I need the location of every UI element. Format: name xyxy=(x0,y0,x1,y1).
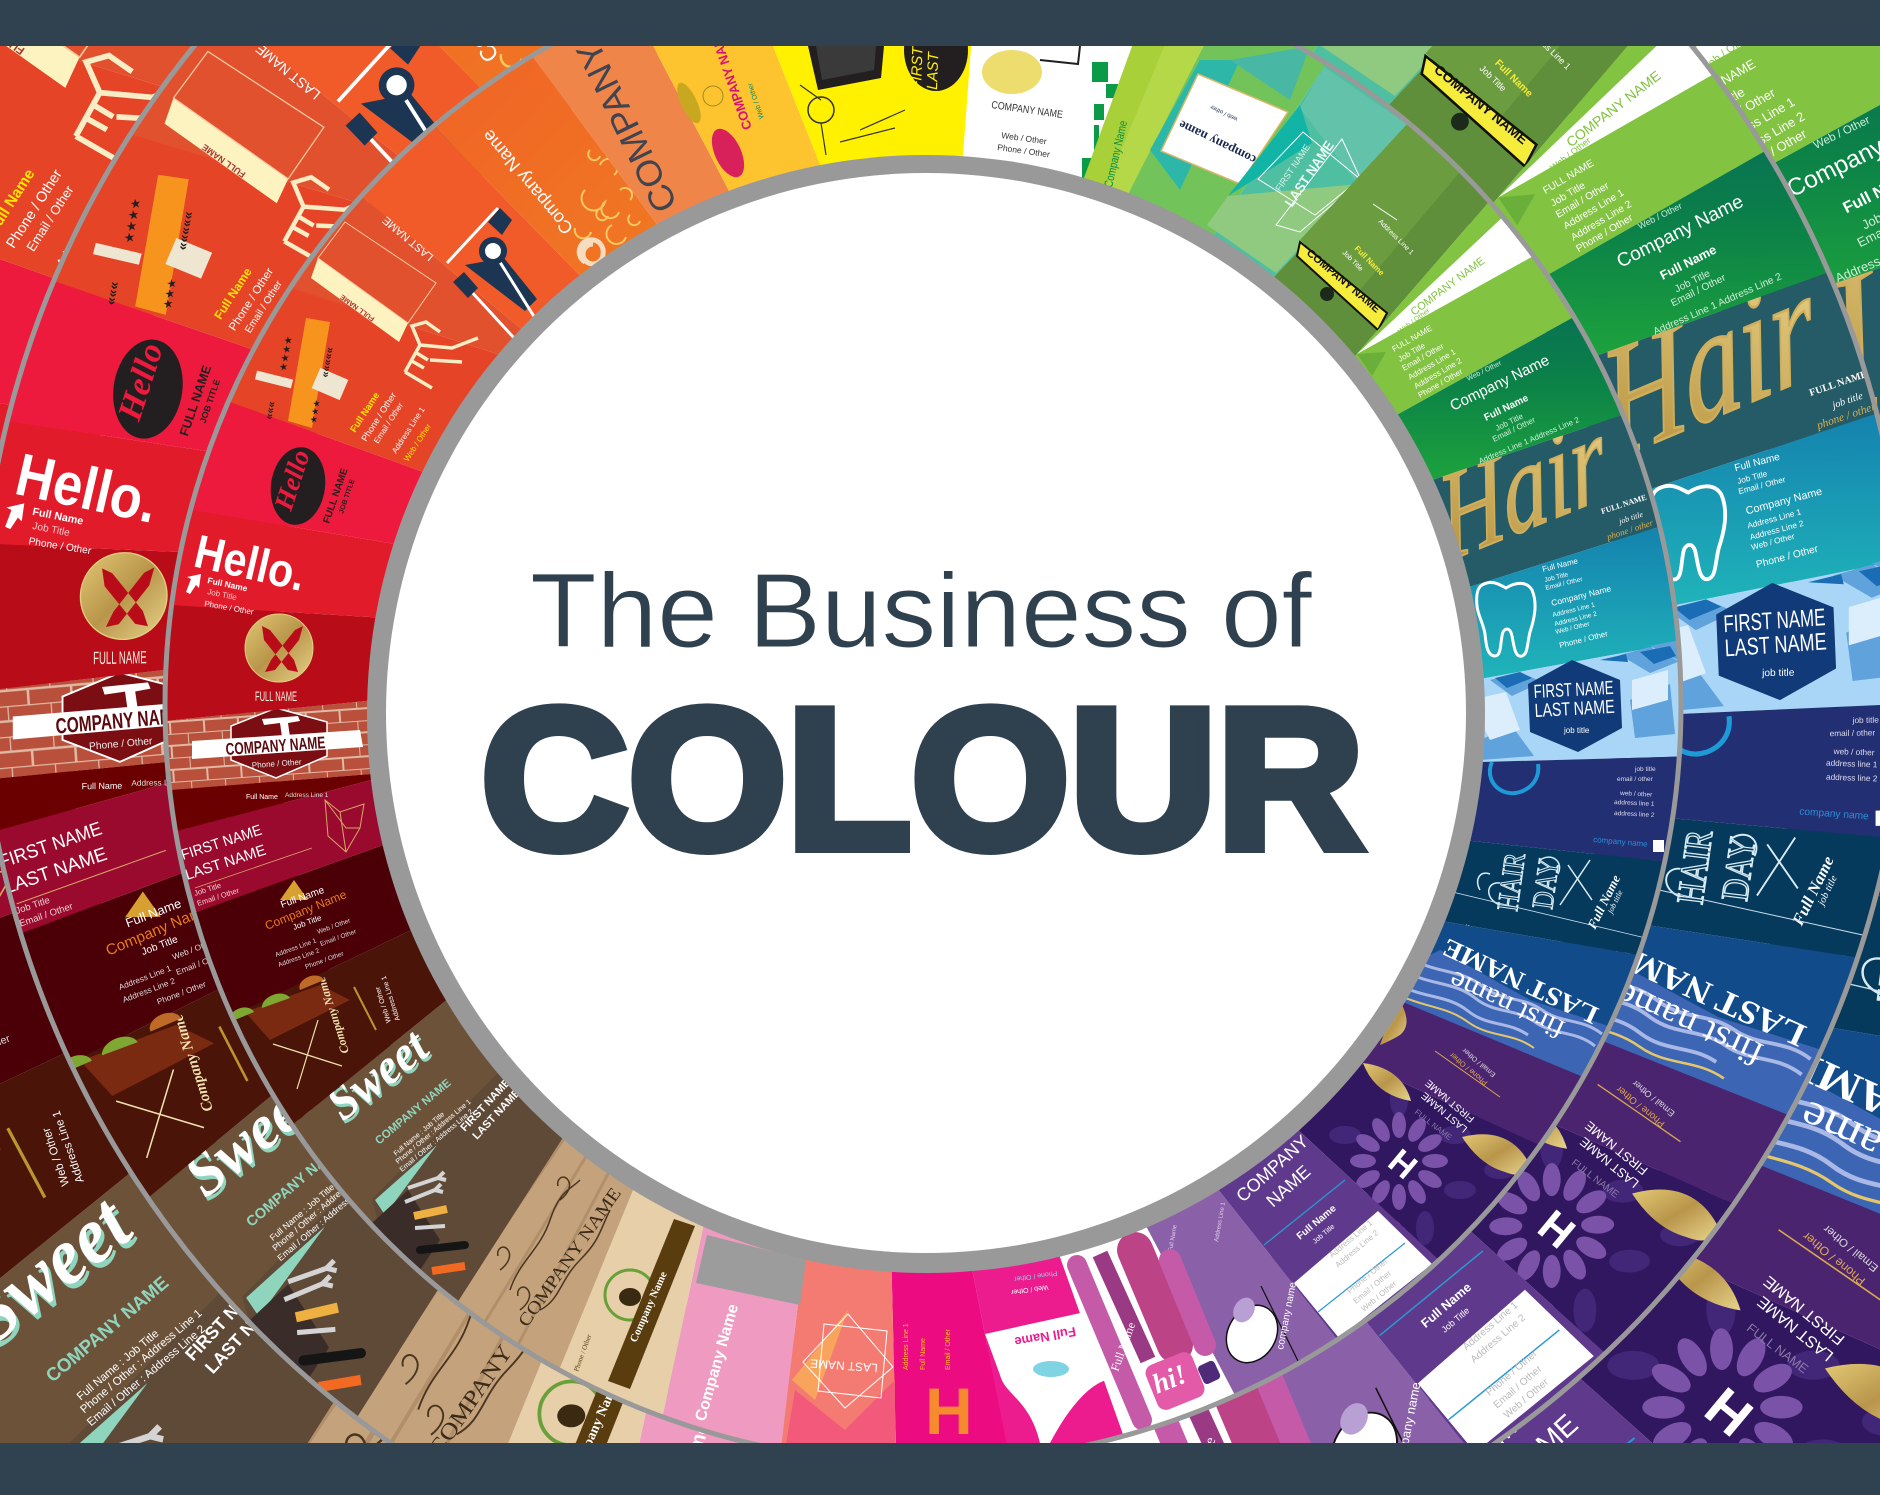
card: medium purple xyxy=(1201,1116,1505,1412)
icon: dial xyxy=(479,237,507,265)
teal first name: FIRST NAME xyxy=(1273,142,1312,193)
contact lines: Web / Other xyxy=(747,81,766,120)
dark green web: Web / Other xyxy=(1466,360,1503,383)
knives card name: FULL NAME xyxy=(255,688,297,704)
yellow label xyxy=(1297,242,1387,330)
lips last name: LAST NAME xyxy=(1419,1089,1470,1134)
panel address one: Address Line 1 xyxy=(1328,1218,1375,1260)
card: yellow gauge xyxy=(746,0,976,177)
gold swirls xyxy=(575,145,640,244)
crimson email: Email / Other xyxy=(196,886,241,908)
sweet details one: Full Name : Job Title xyxy=(393,1111,446,1158)
lips first name: FIRST NAME xyxy=(1423,1077,1477,1124)
Hello card phone: Phone / Other xyxy=(204,599,255,617)
maroon web: Web / Other xyxy=(316,917,352,936)
agate bands xyxy=(1379,950,1620,1095)
white panel xyxy=(1294,1211,1432,1338)
card: gold lips xyxy=(1334,992,1665,1182)
tooth phone: Phone / Other xyxy=(1558,629,1609,650)
brick card contact: Phone / Other xyxy=(252,758,302,770)
tooth web: Web / Other xyxy=(1555,620,1591,636)
green card full name: Full Name xyxy=(1353,244,1386,278)
hexagon first name: FIRST NAME xyxy=(1533,678,1614,703)
icon: yellow leaf xyxy=(672,80,706,126)
hair day rule xyxy=(1444,890,1654,940)
wedge name: COMPANY NAME xyxy=(1409,255,1487,318)
card: white splash xyxy=(962,0,1161,197)
texture wash xyxy=(1300,110,1470,290)
green card job: Job Title xyxy=(1341,249,1364,273)
card: dark maroon xyxy=(110,835,424,1054)
hot pink web: Web / Other xyxy=(1010,1283,1049,1295)
card: gold knives xyxy=(70,599,403,730)
navy hexagon xyxy=(1528,660,1622,752)
card: orange company name xyxy=(349,0,671,295)
hair day contact: Web / Other xyxy=(1463,922,1499,941)
white swirl xyxy=(579,240,603,264)
shadow wedge xyxy=(1357,352,1386,376)
gold chain xyxy=(354,987,376,1030)
tooth job: Job Title xyxy=(1544,571,1569,584)
wood grain xyxy=(460,1130,610,1360)
purple full name: Full Name xyxy=(1295,1203,1339,1242)
dark green name: Company Name xyxy=(1447,352,1552,415)
yellow handle xyxy=(414,1209,447,1216)
tooth company: Company Name xyxy=(1550,583,1612,608)
yellow orange name: COMPANY NAME xyxy=(706,25,755,132)
card: dark purple flower xyxy=(1283,1051,1620,1321)
hi word: hi! xyxy=(1148,1359,1191,1400)
maroon job: Job Title xyxy=(292,913,323,932)
icon: black oval xyxy=(266,444,330,528)
crimson last name: LAST NAME xyxy=(183,842,268,884)
label name: COMPANY NAME xyxy=(1304,247,1382,315)
stars: ★★★★ xyxy=(278,335,295,373)
navy company: company name xyxy=(1593,835,1649,849)
green email: Email / Other xyxy=(1400,341,1446,373)
bottle card address: Address Line 1 xyxy=(390,405,427,455)
lilac bar xyxy=(1170,1260,1205,1345)
sweet word: Sweet xyxy=(315,1016,440,1131)
card: navy xyxy=(1444,754,1773,870)
sweet company: COMPANY NAME xyxy=(373,1077,454,1147)
outline square xyxy=(1276,139,1361,232)
card: magenta H xyxy=(891,1245,1023,1495)
card: tooth xyxy=(1444,500,1770,684)
navy job: job title xyxy=(1634,766,1656,773)
card: skeleton band xyxy=(206,127,536,388)
icon: frame xyxy=(808,46,884,90)
dark teal facet xyxy=(1228,105,1312,196)
strip name: Full Name xyxy=(246,794,278,801)
icon: lips upper xyxy=(1380,1005,1407,1045)
icon: blue patch xyxy=(1033,1361,1069,1377)
lime name: Company Name xyxy=(1101,119,1130,189)
lime darker strip xyxy=(1100,0,1247,208)
badge job title: JOB TITLE xyxy=(338,478,357,515)
card: hi xyxy=(1050,1209,1276,1495)
icon: rooster xyxy=(619,1288,641,1306)
panel rule xyxy=(1318,1243,1405,1312)
brown band xyxy=(608,1219,695,1389)
canyon name: Company Name xyxy=(314,975,352,1055)
maroon email: Email / Other xyxy=(319,928,358,948)
wood half xyxy=(372,1073,578,1367)
icon: small square xyxy=(1197,1360,1221,1385)
icon: bottle body xyxy=(316,378,344,390)
outlined frame xyxy=(318,222,436,323)
card: Hair xyxy=(1412,385,1744,595)
card: blue hexagon xyxy=(1445,626,1773,763)
navy address one: address line 1 xyxy=(1614,799,1655,808)
top bar xyxy=(0,0,1880,46)
lips email: Email / Other xyxy=(1461,1046,1497,1078)
orange facet xyxy=(792,1310,848,1400)
green phone: Phone / Other xyxy=(1416,367,1464,400)
icon: red leaf xyxy=(705,124,751,182)
outline diamond xyxy=(1258,132,1360,215)
maroon address two: Address Line 2 xyxy=(277,947,321,969)
green job: Job Title xyxy=(1396,341,1427,364)
card: teal geometric xyxy=(1207,0,1517,297)
bottle card web: Web / Other xyxy=(402,422,433,463)
icon: yellow splash xyxy=(982,50,1042,94)
canyon web: Web / Other xyxy=(374,985,393,1024)
canyon rock xyxy=(245,985,350,1040)
maroon company: Company Name xyxy=(263,887,349,933)
hexagon last name: LAST NAME xyxy=(1534,697,1615,722)
Hair name: FULL NAME xyxy=(1600,493,1648,516)
day word: DAY xyxy=(1526,857,1566,911)
sweet details three: Email / Other : Address Line 2 xyxy=(399,1108,475,1174)
strip address: Address Line 1 xyxy=(285,792,329,799)
dark green email: Email / Other xyxy=(1491,415,1537,444)
icon: bear xyxy=(1216,1296,1288,1372)
flower H: H xyxy=(1381,1142,1424,1187)
bottom bar xyxy=(0,1443,1880,1495)
card: blue agate xyxy=(1379,917,1738,1111)
white face shape xyxy=(985,1312,1106,1443)
tooth name: Full Name xyxy=(1541,556,1579,574)
maroon name: Full Name xyxy=(279,885,326,911)
card: spatula xyxy=(278,39,599,350)
line diamond xyxy=(803,1314,893,1408)
oval first name: FIRST xyxy=(908,44,927,90)
hair day job: job title xyxy=(1605,888,1625,916)
card: brick xyxy=(73,698,396,798)
pink bar one xyxy=(1077,1265,1142,1420)
icon: green tools xyxy=(1082,62,1118,182)
brick card name: COMPANY NAME xyxy=(225,733,326,759)
icon: hexagon logo xyxy=(231,708,327,778)
cream band xyxy=(311,258,408,342)
wheat: ««««« xyxy=(319,346,336,379)
card: light purple xyxy=(1137,1168,1395,1473)
dark green full name: Full Name xyxy=(1482,393,1531,424)
coral last name: LAST NAME xyxy=(810,1356,878,1375)
icon: spatula head xyxy=(488,208,512,235)
chevron panel xyxy=(1207,184,1360,273)
icon: gold seal xyxy=(245,614,313,682)
icon: blue ring xyxy=(1490,762,1538,793)
card: green watercolour xyxy=(1255,20,1558,377)
stars lower: ★★★ xyxy=(308,399,322,424)
card: bottle xyxy=(114,261,526,482)
white centre disc xyxy=(386,173,1466,1253)
icon: tooth xyxy=(1477,582,1535,656)
agate first name: first name xyxy=(1444,964,1570,1045)
Hello heading: Hello. xyxy=(190,524,311,601)
grey ring xyxy=(367,155,1485,1273)
Hair phone: phone / other xyxy=(1605,517,1655,542)
sweet shadow: Sweet xyxy=(317,1019,442,1134)
card: dark green xyxy=(1373,270,1698,487)
card: watercolour xyxy=(1121,0,1385,245)
sweet details two: Phone / Other : Address Line 1 xyxy=(395,1099,473,1166)
maroon address one: Address Line 1 xyxy=(274,937,318,959)
green full name: FULL NAME xyxy=(1390,324,1434,354)
icon: dial centre xyxy=(485,243,501,259)
tool pouch xyxy=(372,1190,440,1270)
magenta text two: Full Name xyxy=(920,1338,927,1370)
purple name: NAME xyxy=(1262,1161,1314,1211)
teal last name: LAST NAME xyxy=(1281,138,1337,210)
bottle card email: Email / Other xyxy=(372,401,405,445)
green card address: Address Line 1 xyxy=(1377,218,1415,257)
hot pink phone: Phone / Other xyxy=(1013,1269,1058,1282)
card: light orange COMPANY xyxy=(456,0,739,243)
icon: lips middle xyxy=(1363,1063,1411,1101)
watercolour web: web / other xyxy=(1210,103,1240,122)
card: crimson first name xyxy=(82,774,411,943)
rose bar xyxy=(1135,1250,1175,1345)
chevrons: ««« xyxy=(263,400,278,421)
icon: flower petals xyxy=(1350,1112,1448,1210)
icon: gold dots xyxy=(280,880,308,900)
wrenches xyxy=(405,1172,446,1228)
green address one: Address Line 1 xyxy=(1406,347,1458,382)
panel web: Web / Other xyxy=(1360,1279,1398,1314)
splash phone: Phone / Other xyxy=(997,142,1051,159)
light purple details: Full Name xyxy=(1168,1224,1179,1252)
badge lettering: Hello xyxy=(268,446,316,515)
agate gold line xyxy=(1396,994,1534,1048)
fruit slice orange xyxy=(299,975,324,990)
large company word: COMPANY xyxy=(569,35,685,219)
title: COLOUR: COLOUR xyxy=(481,668,1364,891)
icon: spatula lower xyxy=(453,272,478,298)
canyon address: Address Line 1 xyxy=(381,975,402,1022)
pink name: Company Name xyxy=(693,1302,742,1423)
magenta text three: Email / Other xyxy=(945,1328,952,1370)
splash web: Web / Other xyxy=(1001,130,1048,146)
title: The Business of: The Business of xyxy=(530,552,1313,670)
light purple address: Address Line 1 xyxy=(1214,1201,1227,1242)
wedge contact: Web / Other xyxy=(1397,307,1432,336)
dark green address: Address Line 1 Address Line 2 xyxy=(1477,415,1581,466)
lips rule xyxy=(1435,1051,1500,1097)
line square xyxy=(818,1324,887,1398)
orange card name: Company Name xyxy=(478,126,577,238)
sweet last name: LAST NAME xyxy=(470,1087,523,1142)
navy H logo xyxy=(1653,840,1664,852)
agate pale bands xyxy=(1398,960,1602,1046)
light purple name: company name xyxy=(1275,1281,1299,1351)
grey panel xyxy=(696,1235,806,1305)
card: dark red strip xyxy=(73,772,396,856)
inner ring of business cards xyxy=(168,46,1678,1443)
icon: H seal xyxy=(703,86,723,106)
card: canyon xyxy=(152,924,470,1182)
black handle xyxy=(420,1245,465,1250)
card: yellow orange xyxy=(608,0,825,210)
navy web: web / other xyxy=(1619,790,1653,799)
orange stripe xyxy=(288,318,330,428)
icon: crossed knives xyxy=(262,626,303,672)
card: coral xyxy=(771,1235,898,1495)
tooth address two: Address Line 2 xyxy=(1554,611,1598,628)
icon: lips lower xyxy=(1462,1134,1530,1175)
oval last name: LAST xyxy=(924,50,942,90)
white panel xyxy=(1161,74,1288,184)
mint panel xyxy=(1300,67,1414,187)
crimson first name: FIRST NAME xyxy=(179,822,264,864)
white name band xyxy=(192,730,363,759)
wood name: COMPANY NAME xyxy=(514,1184,625,1330)
agate last name: LAST NAME xyxy=(1438,933,1603,1030)
bottle card name: Full Name xyxy=(348,391,382,435)
badge name: FULL NAME xyxy=(321,467,351,525)
dark green job: Job Title xyxy=(1494,411,1525,433)
cream phone: Phone / Other xyxy=(572,1333,593,1373)
cube dark facets xyxy=(1495,646,1676,688)
card: sweet tools xyxy=(222,981,578,1367)
crimson job: Job Title xyxy=(193,881,222,898)
teal wash upper xyxy=(1230,46,1310,100)
Hair lettering: Hair xyxy=(1429,385,1614,590)
icon: rooster seal xyxy=(605,1270,655,1320)
cube pale facets xyxy=(1470,670,1668,740)
purple bar xyxy=(1100,1254,1148,1360)
orange handle xyxy=(432,1266,465,1271)
icon: black frame xyxy=(1040,46,1080,64)
wood ornament frame xyxy=(498,1177,610,1310)
cube facets xyxy=(1480,640,1680,760)
Hello card details: Full Name xyxy=(207,575,249,593)
hi bubble xyxy=(1143,1349,1207,1413)
bear rule xyxy=(1261,1286,1300,1365)
icon: crossed arrows xyxy=(273,1020,342,1089)
purple company: COMPANY xyxy=(1232,1131,1312,1206)
teal wash xyxy=(1150,60,1240,190)
panel address two: Address Line 2 xyxy=(1334,1228,1381,1270)
fruit slices xyxy=(229,994,290,1022)
icon: gauge xyxy=(808,97,834,123)
icon: curls xyxy=(1478,857,1560,905)
card: hair day xyxy=(1418,838,1744,972)
band name: FULL NAME xyxy=(339,292,376,322)
Hello card job title: Job Title xyxy=(207,587,238,602)
watercolour name: company name xyxy=(1176,117,1258,168)
purple job: Job Title xyxy=(1312,1223,1336,1246)
card: hot pink xyxy=(968,1229,1159,1495)
icon: grill wedge xyxy=(465,258,537,311)
green card rule xyxy=(1373,204,1397,220)
hexagon job: job title xyxy=(1563,726,1590,735)
card: cream rooster xyxy=(524,1166,707,1495)
tooth address one: Address Line 1 xyxy=(1552,602,1596,619)
icon: bottle xyxy=(256,375,292,384)
sweet first name: FIRST NAME xyxy=(458,1077,513,1134)
icon: skeleton xyxy=(405,322,478,388)
icon: geometric owl xyxy=(325,800,364,852)
card: crimson Hello badge xyxy=(97,360,451,548)
icon: black oval xyxy=(904,9,968,91)
icon: arrow xyxy=(186,574,201,594)
lips phone: Phone / Other xyxy=(1447,1050,1489,1087)
icon: utensil lines xyxy=(447,208,535,350)
card: lime xyxy=(1077,0,1247,208)
crimson rule xyxy=(195,848,312,888)
hair word: HAIR xyxy=(1491,851,1532,913)
flower name: FULL NAME xyxy=(1413,1107,1453,1142)
white wedge xyxy=(1357,213,1537,354)
panel phone: Phone / Other xyxy=(1346,1256,1390,1296)
panel email: Email / Other xyxy=(1352,1268,1393,1306)
icon: caliper lines xyxy=(800,85,905,155)
magenta text: Address Line 1 xyxy=(903,1323,910,1370)
icon: frame inner xyxy=(816,46,876,80)
card: bright green xyxy=(1337,122,1659,428)
Hair job: job title xyxy=(1617,510,1645,526)
icon: bug xyxy=(1320,287,1334,301)
lower rose xyxy=(785,1380,895,1450)
hi name: Full Name xyxy=(1108,1320,1138,1373)
card: Hello xyxy=(70,494,419,619)
bottle card phone: Phone / Other xyxy=(359,391,398,443)
splash name: COMPANY NAME xyxy=(991,99,1064,121)
icon: scissors xyxy=(1560,860,1592,905)
icon: dim petals xyxy=(1329,1083,1516,1245)
icon: hammer xyxy=(262,716,300,737)
mint ribbon xyxy=(375,1145,437,1215)
magenta H: H xyxy=(925,1374,973,1448)
card: pink xyxy=(638,1209,806,1495)
icon: hood xyxy=(1229,1294,1259,1326)
middle divider arc xyxy=(165,0,1681,1463)
navy address two: address line 2 xyxy=(1614,810,1655,819)
maroon phone: Phone / Other xyxy=(304,950,345,971)
spatula card name: LAST NAME xyxy=(381,214,436,263)
green address two: Address Line 2 xyxy=(1412,356,1464,391)
hair day name: Full Name xyxy=(1584,872,1623,932)
hot pink name: Full Name xyxy=(1013,1324,1077,1350)
panel rule top xyxy=(1264,1180,1345,1245)
band name: Company Name xyxy=(628,1270,670,1344)
card: wood ornament xyxy=(416,1114,643,1455)
navy email: email / other xyxy=(1617,776,1654,783)
tooth email: Email / Other xyxy=(1545,576,1584,592)
